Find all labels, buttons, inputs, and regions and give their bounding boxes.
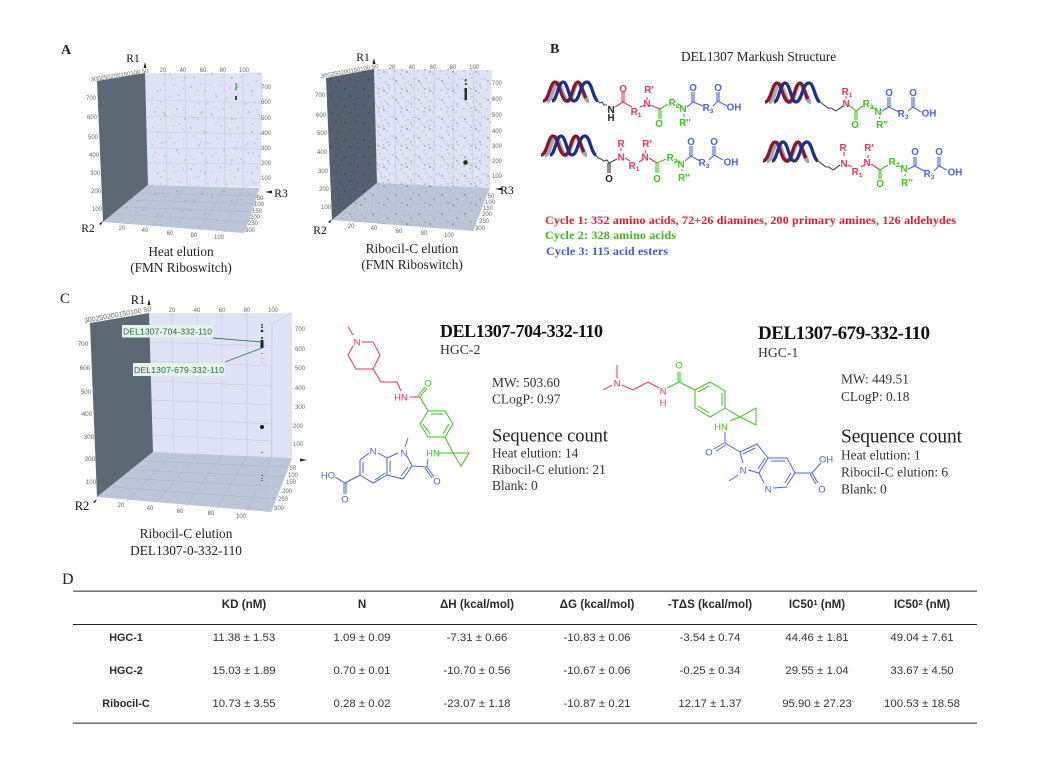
row: Ribocil-C: 100.53 ± 18.58 xyxy=(884,698,960,710)
tick labels: 500 xyxy=(295,366,306,372)
tick labels: 100 xyxy=(288,473,299,479)
row: HGC-1: 49.04 ± 7.61 xyxy=(890,632,954,644)
tick labels: 300 xyxy=(318,169,329,175)
structure: HGC-1: N xyxy=(765,484,772,496)
structure: Markush 3: O xyxy=(653,174,661,185)
tick labels: 100 xyxy=(236,514,247,520)
structure: Markush 4: O xyxy=(911,147,919,158)
tick labels: 100 xyxy=(321,205,332,211)
table header: (nM) xyxy=(817,598,845,611)
caption: Heat elution xyxy=(148,244,214,259)
structure: Markush 2: OH xyxy=(922,108,936,120)
structure: Markush 1: N xyxy=(607,105,615,116)
structure: HGC-2: HN xyxy=(394,392,408,404)
tick labels: 200 xyxy=(261,161,272,167)
row labels: HGC-1 xyxy=(109,632,143,644)
table header: (nM) xyxy=(922,598,950,611)
structure: HGC-2 xyxy=(321,327,469,506)
panel: DEL1307-0-332-110 3D plot xyxy=(75,293,307,558)
tick labels: 700 xyxy=(295,327,306,333)
caption: (FMN Riboswitch) xyxy=(361,257,463,272)
tick labels: 50 xyxy=(488,194,495,200)
tick labels: 100 xyxy=(293,442,304,448)
legend: cycles: Cycle 2: 328 amino acids xyxy=(545,228,676,242)
structure: Markush 4: R xyxy=(852,167,859,178)
tick labels: 60 xyxy=(396,229,403,235)
structure: HGC-2: N xyxy=(401,448,408,460)
structure: Markush 1: R xyxy=(669,98,676,109)
axis labels: R1 xyxy=(131,293,145,307)
tick labels: 400 xyxy=(82,411,93,418)
structure: Markush 4: R xyxy=(889,157,896,168)
structure: Markush 4: R xyxy=(924,169,931,180)
row: HGC-1 xyxy=(213,632,954,644)
row: HGC-2: 15.03 ± 1.89 xyxy=(212,665,276,677)
tick labels: 300 xyxy=(274,506,285,512)
tick labels: 100 xyxy=(492,174,503,180)
tick labels: 20 xyxy=(118,503,125,509)
table header: KD (nM) xyxy=(222,598,266,611)
structure: HGC-1: OH xyxy=(819,454,833,466)
hits xyxy=(463,79,468,165)
structure: Markush 1: 3 xyxy=(710,108,714,115)
callout: DEL1307-679-332-110: DEL1307-679-332-110 xyxy=(134,365,224,375)
row: HGC-1: -3.54 ± 0.74 xyxy=(680,632,740,644)
structure: Markush 2: O xyxy=(909,88,917,99)
tick labels: 20 xyxy=(348,224,355,230)
tick labels: 700 xyxy=(261,85,272,91)
row: HGC-1: 11.38 ± 1.53 xyxy=(213,632,275,644)
panel label B: B xyxy=(550,42,559,57)
tick labels: 40 xyxy=(142,228,149,234)
row: Ribocil-C: 12.17 ± 1.37 xyxy=(678,698,742,710)
structure: HGC-1: HN xyxy=(714,422,728,433)
tick labels: 20 xyxy=(119,226,126,232)
structure: Markush 3: R xyxy=(617,139,625,150)
row: HGC-2: 29.55 ± 1.04 xyxy=(785,665,849,677)
tick labels: 400 xyxy=(295,386,306,392)
compound subheading: HGC-1: HGC-1 xyxy=(758,345,798,360)
structure: HGC-2: HO xyxy=(321,470,335,482)
caption: DEL1307-0-332-110 xyxy=(130,543,242,558)
table header: ΔH (kcal/mol) xyxy=(440,598,514,611)
panel label D: D xyxy=(62,571,74,588)
tick labels: 600 xyxy=(295,347,306,353)
structure: Markush 3: R xyxy=(699,158,706,169)
structure: Markush 2: R xyxy=(863,99,870,110)
tick labels: 500 xyxy=(261,116,272,122)
row: Ribocil-C: 0.28 ± 0.02 xyxy=(334,698,390,710)
structure: Markush 3: R xyxy=(667,153,674,164)
structure: Markush 4 xyxy=(763,142,962,190)
tick labels: 600 xyxy=(316,113,327,119)
structure: Markush 1: O xyxy=(655,119,663,130)
tick labels: 600 xyxy=(80,365,91,372)
tick labels: 300 xyxy=(261,146,272,152)
row labels: HGC-2 xyxy=(109,665,143,677)
structure: Markush 3: N xyxy=(641,152,649,164)
tick labels: 700 xyxy=(86,96,97,102)
heading: sequence count HGC-1: Sequence count xyxy=(841,426,963,448)
structure: Markush 4: N xyxy=(840,159,848,170)
structure: Markush 3: R'' xyxy=(678,173,690,184)
tick labels: 80 xyxy=(244,308,251,314)
sequence counts: HGC-1: Blank: 0 xyxy=(841,482,887,496)
callout: DEL1307-704-332-110: DEL1307-704-332-110 xyxy=(123,326,212,336)
tick labels: 300250200150100 50 xyxy=(84,306,152,325)
structure: HGC-1 xyxy=(603,360,833,496)
tick labels: 500 xyxy=(492,113,503,119)
tick labels: 80 xyxy=(220,68,227,74)
floor xyxy=(103,185,260,233)
structure: HGC-2: O xyxy=(424,378,432,390)
tick labels: 100 xyxy=(268,308,279,314)
structure: Markush 3: O xyxy=(605,174,613,185)
structure: HGC-2: N xyxy=(354,338,361,348)
tick labels: 600 xyxy=(492,97,503,103)
structure: Markush 4: R' xyxy=(864,143,874,154)
structure: Markush 2: O xyxy=(851,120,859,131)
heading: sequence count HGC-2: Sequence count xyxy=(492,426,609,446)
axis labels: R3 xyxy=(500,185,514,197)
structure: Markush 4: N xyxy=(900,164,908,175)
tick labels: 200 xyxy=(282,489,293,495)
tick labels: 40 xyxy=(147,506,154,512)
structure: Markush 4: 2 xyxy=(896,162,900,169)
structure: Markush 1: O xyxy=(714,83,722,94)
tick labels: 150 xyxy=(483,206,494,212)
structure: HGC-1: N xyxy=(614,378,621,390)
table: binding and IC50 data xyxy=(73,590,977,724)
tick labels: 300 xyxy=(475,226,486,232)
hits xyxy=(235,83,237,100)
properties: HGC-1: MW: 449.51 xyxy=(841,372,909,386)
tick labels: 700 xyxy=(78,341,89,348)
back wall xyxy=(374,69,492,188)
panel label A: A xyxy=(61,43,72,58)
tick labels: 60 xyxy=(430,65,437,71)
tick labels: 150 xyxy=(252,209,263,215)
caption xyxy=(130,526,242,558)
legend: cycles: Cycle 3: 115 acid esters xyxy=(546,244,668,258)
sequence counts: HGC-2: Blank: 0 xyxy=(492,478,538,493)
tick labels: 20 xyxy=(389,65,396,71)
tick labels: 600 xyxy=(87,115,98,121)
axis labels xyxy=(313,52,514,237)
row: HGC-1: -7.31 ± 0.66 xyxy=(447,632,507,644)
structure: Markush 2: R'' xyxy=(876,120,888,131)
table header: 1 xyxy=(813,598,817,607)
tick labels: 700 xyxy=(492,81,503,87)
structure: Markush 1: R' xyxy=(644,85,654,96)
caption: Ribocil-C elution xyxy=(140,526,233,541)
structure: Markush 3: R' xyxy=(642,139,652,150)
structure: Markush 1 xyxy=(543,82,741,130)
structure: HGC-2: O xyxy=(341,494,349,506)
tick labels: 250 xyxy=(248,221,259,227)
caption: (FMN Riboswitch) xyxy=(130,260,232,275)
table header: ΔG (kcal/mol) xyxy=(560,598,634,611)
tick labels: 100 xyxy=(86,479,97,486)
floor xyxy=(97,452,292,512)
row: Ribocil-C: 95.90 ± 27.23 xyxy=(782,698,852,710)
axis labels: R1 xyxy=(356,52,370,64)
tick labels: 40 xyxy=(409,65,416,71)
sequence counts: HGC-1: Heat elution: 1 xyxy=(841,448,921,462)
table header xyxy=(222,598,950,611)
tick labels: 400 xyxy=(89,153,100,159)
panel label C: C xyxy=(60,291,70,307)
compound heading: DEL1307-704-332-110: DEL1307-704-332-110 xyxy=(440,321,603,341)
sequence counts: HGC-2: Ribocil-C elution: 21 xyxy=(492,462,606,477)
structure: Markush 2: R xyxy=(898,109,905,120)
structure: Markush 2: 3 xyxy=(905,114,909,121)
structure: Markush 1: N xyxy=(679,104,687,115)
structure: HGC-1: O xyxy=(675,360,683,372)
legend: cycles: Cycle 1: 352 amino acids, 72+26 diamines, 200 primary amines, 126 aldehydes xyxy=(545,213,956,227)
compound heading: DEL1307-679-332-110: DEL1307-679-332-110 xyxy=(758,323,930,344)
axis labels: R3 xyxy=(274,188,288,200)
tick labels: 40 xyxy=(180,68,187,74)
row: Ribocil-C xyxy=(212,698,960,710)
tick labels: 100 xyxy=(261,176,272,182)
tick labels: 100 xyxy=(469,65,480,71)
axis labels: R1 xyxy=(126,53,140,65)
left wall xyxy=(326,69,377,220)
properties: HGC-2 xyxy=(492,375,561,406)
structure: Markush 3: OH xyxy=(724,158,738,168)
row: HGC-2: 0.70 ± 0.01 xyxy=(334,665,390,677)
structure: HGC-1: N xyxy=(740,466,747,476)
structure: Markush 3: O xyxy=(710,137,718,148)
tick labels: 400 xyxy=(492,129,503,135)
axis labels xyxy=(75,293,307,513)
row: HGC-2 xyxy=(212,665,954,677)
tick labels: 40 xyxy=(194,308,201,314)
tick labels: 300 xyxy=(245,228,256,234)
structure: Markush 1: 1 xyxy=(638,112,642,119)
structure: Markush 1: O xyxy=(689,83,697,94)
structure: Markush 1: H xyxy=(607,113,615,124)
structure: HGC-1: H xyxy=(660,398,667,409)
row labels: Ribocil-C xyxy=(102,698,150,710)
structure: Markush 3 xyxy=(541,136,738,185)
structure: Markush 4: N xyxy=(863,158,871,169)
structure: Markush 2: 1 xyxy=(849,92,853,99)
structure: Markush 1: N xyxy=(643,99,651,110)
caption: Ribocil-C elution xyxy=(366,241,459,256)
tick labels: 500 xyxy=(81,389,92,396)
table header: -TΔS (kcal/mol) xyxy=(668,598,752,611)
tick labels: 200 xyxy=(250,215,261,221)
tick labels: 300 xyxy=(84,434,95,441)
structure: Markush 2: R xyxy=(842,87,849,98)
structure: Markush 4: 1 xyxy=(859,172,863,179)
tick labels: 60 xyxy=(177,509,184,515)
panel: heat elution 3D plot xyxy=(81,53,288,275)
row: HGC-2: 33.67 ± 4.50 xyxy=(890,665,954,677)
structure: Markush 2 xyxy=(765,83,936,131)
row: Ribocil-C: 10.73 ± 3.55 xyxy=(212,698,276,710)
callout lines xyxy=(213,338,262,342)
structure: Markush 2: O xyxy=(885,88,893,99)
caption xyxy=(361,241,463,272)
structure: Markush 2: N xyxy=(842,99,850,110)
tick labels: 250 xyxy=(278,497,289,503)
sequence counts: HGC-1: Ribocil-C elution: 6 xyxy=(841,464,948,480)
tick labels: 300 xyxy=(295,405,306,411)
structure: Markush 3: O xyxy=(687,137,695,148)
tick labels: 100 xyxy=(214,235,225,241)
tick labels: 60 xyxy=(219,308,226,314)
tick labels: 400 xyxy=(317,150,328,156)
row labels xyxy=(102,632,150,710)
tick labels: 250 xyxy=(479,219,490,225)
legend: cycles xyxy=(545,213,956,258)
tick labels xyxy=(86,68,272,241)
tick labels xyxy=(78,306,306,520)
tick labels: 80 xyxy=(208,511,215,517)
row: HGC-1: 1.09 ± 0.09 xyxy=(334,632,390,644)
structure: HGC-2: O xyxy=(433,476,441,488)
axis labels xyxy=(81,53,288,235)
tick labels: 40 xyxy=(371,226,378,232)
structure: Markush 3: N xyxy=(677,160,685,170)
tick labels: 200 xyxy=(91,189,102,195)
structure: HGC-2: N xyxy=(370,446,377,458)
hits xyxy=(260,324,264,481)
table header: N xyxy=(358,598,366,611)
compound subheading: HGC-2: HGC-2 xyxy=(440,342,480,357)
row: HGC-1: 44.46 ± 1.81 xyxy=(785,632,849,644)
row: HGC-1: -10.83 ± 0.06 xyxy=(563,632,631,644)
structure: HGC-2: HN xyxy=(426,448,440,460)
sequence counts: HGC-2: Heat elution: 14 xyxy=(492,446,579,460)
structure: Markush 4: R xyxy=(839,143,847,154)
tick labels: 300250200150100 50 xyxy=(91,68,150,84)
tick labels: 100 xyxy=(485,200,496,206)
panel: Ribocil-C elution 3D plot xyxy=(313,52,514,272)
left wall xyxy=(90,313,153,497)
structure: Markush 3: 3 xyxy=(706,163,710,170)
structure: Markush 4: 3 xyxy=(931,174,935,181)
properties: HGC-2: CLogP: 0.97 xyxy=(492,392,561,406)
back wall xyxy=(145,73,262,187)
structure: Markush 1: R'' xyxy=(679,118,691,129)
tick labels: 200 xyxy=(482,212,493,218)
tick labels: 80 xyxy=(421,231,428,237)
row: HGC-2: -10.70 ± 0.56 xyxy=(443,665,511,677)
tick labels: 60 xyxy=(200,68,207,74)
structure: HGC-1: O xyxy=(818,484,826,496)
properties: HGC-1: CLogP: 0.18 xyxy=(841,389,910,404)
tick labels: 200 xyxy=(492,159,503,165)
tick labels: 50 xyxy=(290,466,297,472)
structure: Markush 1: OH xyxy=(727,102,741,114)
tick labels: 500 xyxy=(317,131,328,137)
properties: HGC-1 xyxy=(841,372,910,404)
row: Ribocil-C: -10.87 ± 0.21 xyxy=(563,698,631,710)
tick labels: 300 xyxy=(492,144,503,150)
structure: Markush 3: N xyxy=(617,152,625,164)
tick labels: 100 xyxy=(254,202,265,208)
tick labels: 100 xyxy=(444,233,455,239)
structure: Markush 4: OH xyxy=(948,168,962,178)
tick labels: 200 xyxy=(85,456,96,463)
structure: Markush 1: R xyxy=(703,103,710,114)
axis labels: R2 xyxy=(81,223,95,235)
tick labels: 100 xyxy=(92,207,103,213)
tick labels: 300 xyxy=(90,171,101,177)
axis labels: R2 xyxy=(313,225,327,237)
tick labels: 200 xyxy=(293,424,304,430)
tick labels: 100 xyxy=(239,68,250,74)
tick labels: 200 xyxy=(319,187,330,193)
row: Ribocil-C: -23.07 ± 1.18 xyxy=(443,698,511,710)
structure: Markush 3: 1 xyxy=(636,166,640,173)
caption xyxy=(130,244,232,275)
sequence counts: HGC-2 xyxy=(492,446,606,493)
tick labels: 60 xyxy=(167,231,174,237)
floor xyxy=(332,183,490,231)
axis labels: R2 xyxy=(75,499,89,513)
structure: Markush 4: O xyxy=(935,147,943,158)
tick labels: 500 xyxy=(88,135,99,141)
structure: HGC-1: N xyxy=(660,386,667,398)
tick labels: 700 xyxy=(315,93,326,99)
structure: HGC-1: O xyxy=(705,448,713,458)
structure: Markush 3: R xyxy=(629,161,636,172)
tick labels: 50 xyxy=(257,196,264,202)
table header: 2 xyxy=(918,598,922,607)
properties: HGC-2: MW: 503.60 xyxy=(492,375,560,390)
back wall xyxy=(149,313,292,458)
tick labels: 600 xyxy=(261,100,272,106)
structure: Markush 4: O xyxy=(876,179,884,190)
tick labels: 20 xyxy=(169,308,176,314)
box edge xyxy=(271,324,292,512)
tick labels: 80 xyxy=(191,233,198,239)
structure: Markush 1: 2 xyxy=(676,103,680,110)
structure: Markush 1: O xyxy=(619,84,627,95)
structure: Markush 2: 2 xyxy=(870,104,874,111)
tick labels: 400 xyxy=(261,131,272,137)
structure: Markush 3: 2 xyxy=(674,158,678,165)
row: HGC-2: -10.67 ± 0.06 xyxy=(563,665,631,677)
box outline xyxy=(244,73,262,233)
sequence counts: HGC-1 xyxy=(841,448,948,496)
row: HGC-2: -0.25 ± 0.34 xyxy=(680,665,740,677)
structure: Markush 2: N xyxy=(874,107,882,118)
structure: Markush 1: R xyxy=(631,107,638,118)
structure: Markush 4: R'' xyxy=(901,178,913,189)
tick labels: 150 xyxy=(286,480,297,486)
title: Markush structure: DEL1307 Markush Structure xyxy=(681,49,836,64)
table header: IC50 xyxy=(789,598,813,611)
left wall xyxy=(97,73,148,222)
table header: IC50 xyxy=(894,598,918,611)
tick labels: 20 xyxy=(160,68,167,74)
tick labels: 80 xyxy=(450,65,457,71)
tick labels xyxy=(315,64,503,239)
tick labels: 300250200150100 50 xyxy=(321,64,380,80)
